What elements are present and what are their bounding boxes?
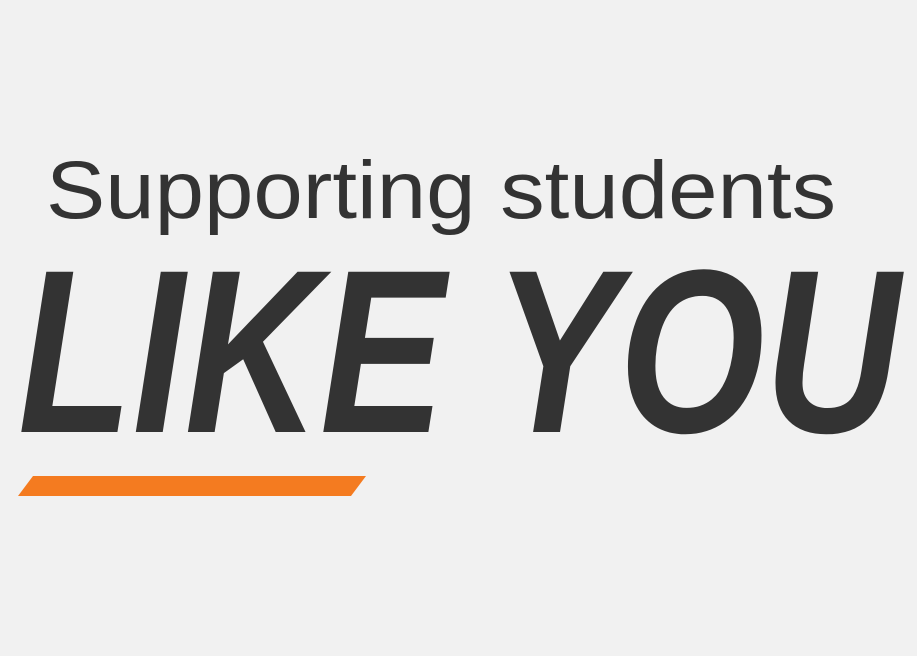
orange underline bar xyxy=(18,476,366,496)
heading: Supporting students: Supporting students xyxy=(46,145,836,236)
